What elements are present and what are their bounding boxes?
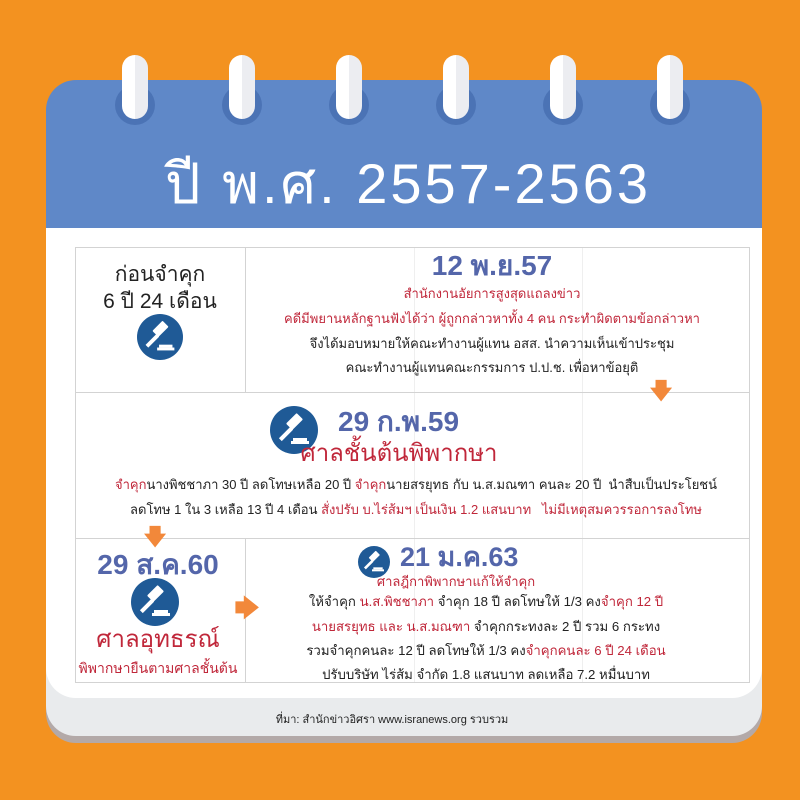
panel: row 1 right — [284, 250, 700, 376]
icon: gavel — [131, 578, 179, 626]
panel: row 3 right: ให้จำคุก น.ส.พิชชาภา จำคุก 18 ปี ลดโทษให้ 1/3 คงจำคุก 12 ปี — [309, 594, 663, 609]
panel: row 3 right: 21 ม.ค.63 — [400, 542, 518, 572]
panel: row 3 left: ศาลอุทธรณ์ — [96, 626, 220, 653]
arrow: down 1: 🡇 — [650, 378, 672, 403]
panel: row 3 right: รวมจำคุกคนละ 12 ปี ลดโทษให้ 1/3 คงจำคุกคนละ 6 ปี 24 เดือน — [306, 643, 666, 658]
panel: row 3 right: ศาลฎีกาพิพากษาแก้ให้จำคุก — [377, 574, 535, 589]
panel: row 2 — [115, 406, 717, 518]
title: ปี พ.ศ. 2557-2563 — [165, 152, 651, 215]
arrow: down 2: 🡇 — [144, 524, 166, 549]
panel: row 2: จำคุกนางพิชชาภา 30 ปี ลดโทษเหลือ 20 ปี จำคุกนายสรยุทธ กับ น.ส.มณฑา คนละ 20 ปี นำสืบเป็นประโยชน์ — [115, 477, 717, 492]
panel: row 1 right: 12 พ.ย.57 — [432, 250, 552, 281]
calendar shadow — [46, 100, 762, 743]
panel: row 1 right: คดีมีพยานหลักฐานฟังได้ว่า ผู้ถูกกล่าวหาทั้ง 4 คน กระทำผิดตามข้อกล่าวหา — [284, 311, 700, 326]
icon: gavel — [137, 314, 183, 360]
icon: gavel — [358, 546, 390, 578]
white page — [46, 200, 762, 698]
panel: row 3 right: นายสรยุทธ และ น.ส.มณฑา จำคุกกระทงละ 2 ปี รวม 6 กระทง — [312, 619, 660, 634]
panel: row 1 right: คณะทำงานผู้แทนคณะกรรมการ ป.ป.ช. เพื่อหาข้อยุติ — [346, 360, 638, 375]
panel: row 2: 29 ก.พ.59 — [338, 406, 459, 437]
calendar footer base — [46, 100, 762, 736]
panel: row 2: ศาลชั้นต้นพิพากษา — [300, 440, 498, 467]
panel: row 2: ลดโทษ 1 ใน 3 เหลือ 13 ปี 4 เดือน สั่งปรับ บ.ไร่ส้มฯ เป็นเงิน 1.2 แสนบาท ไม่มีเหตุสมควรรอการลงโทษ — [130, 502, 702, 517]
header: blue calendar top — [46, 80, 762, 228]
panel: row 1 left: ก่อนจำคุก — [115, 263, 205, 286]
panel: row 3 left: พิพากษายืนตามศาลชั้นต้น — [79, 660, 237, 676]
panel: row 1 right: สำนักงานอัยการสูงสุดแถลงข่าว — [404, 286, 580, 301]
panel: row 3 right: ปรับบริษัท ไร่ส้ม จำกัด 1.8 แสนบาท ลดเหลือ 7.2 หมื่นบาท — [322, 667, 650, 682]
footer: source: ที่มา: สำนักข่าวอิศรา www.isranews.org รวบรวม — [276, 714, 508, 726]
table grid — [75, 247, 750, 683]
panel: row 3 left — [78, 549, 238, 676]
icon: gavel — [270, 406, 318, 454]
panel: row 1 left: 6 ปี 24 เดือน — [103, 290, 217, 313]
panel: row 1 left — [103, 263, 217, 360]
panel: row 1 right: จึงได้มอบหมายให้คณะทำงานผู้แทน อสส. นำความเห็นเข้าประชุม — [310, 336, 674, 351]
panel: row 3 right — [306, 542, 666, 682]
arrow: right: 🡆 — [235, 595, 259, 622]
panel: row 3 left: 29 ส.ค.60 — [97, 549, 219, 580]
calendar rings — [115, 55, 690, 125]
